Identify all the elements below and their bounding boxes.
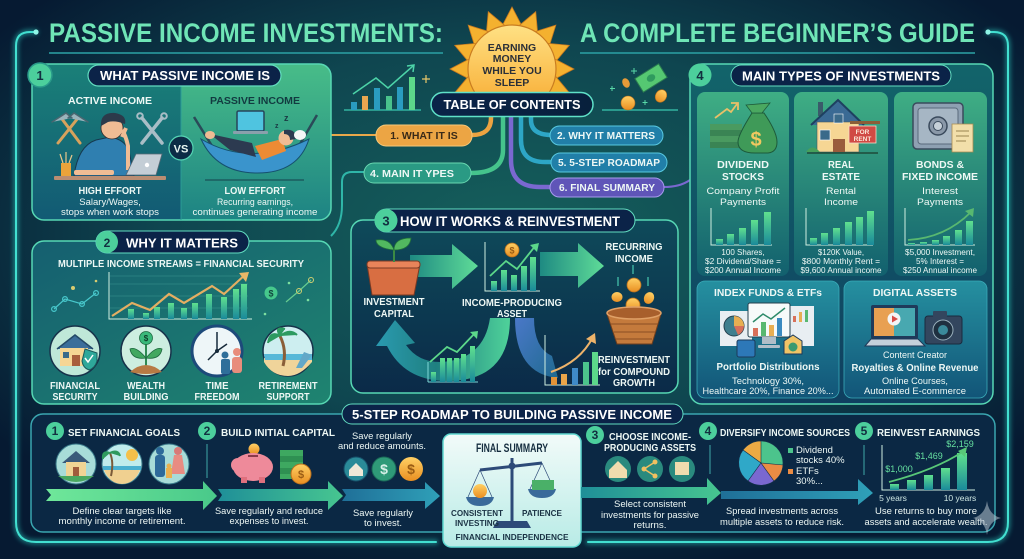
card: index funds and etfs: INDEX FUNDS & ETFs xyxy=(714,288,822,299)
text: step 2b description xyxy=(353,508,413,529)
icon: wrenches xyxy=(137,113,167,143)
icon: potted seedling xyxy=(367,238,420,295)
card: digital assets xyxy=(844,281,987,398)
benefit: time freedom xyxy=(192,326,242,403)
chart: compound growth: 10 years xyxy=(944,493,976,503)
arrow: capital to asset xyxy=(410,244,478,289)
title: A COMPLETE BEGINNER’S GUIDE xyxy=(580,18,975,48)
text: bonds: Interest xyxy=(922,186,958,197)
text: digital assets: Royalties & Online Revenue xyxy=(852,363,979,374)
icon: flying cash and coins xyxy=(602,64,678,110)
text: step 3 description: investments for passive xyxy=(601,510,699,521)
step 3: CHOOSE INCOME- xyxy=(609,432,691,443)
icon: family goal xyxy=(149,444,189,484)
toc item: main types: 4. MAIN IT YPES xyxy=(370,169,454,180)
chart: diversification pie xyxy=(739,441,783,485)
text: bonds xyxy=(902,160,978,208)
toc item: 5-step roadmap xyxy=(551,153,667,172)
text: dividend stocks: DIVIDEND xyxy=(717,160,769,171)
benefit: wealth building: WEALTH xyxy=(127,381,165,392)
text: bonds: Payments xyxy=(917,197,963,208)
arrow: step 2b xyxy=(342,482,440,509)
card: final summary: FINANCIAL INDEPENDENCE xyxy=(456,532,569,542)
sun badge: SLEEP xyxy=(495,77,529,89)
icon: growth chart in loop xyxy=(428,331,478,382)
card: real estate xyxy=(794,92,888,276)
heading: how it works: 3 xyxy=(382,214,390,228)
benefit: time freedom: TIME xyxy=(206,381,229,392)
card: bonds and fixed income xyxy=(894,92,987,276)
icon: house for rent xyxy=(806,100,880,153)
benefit: wealth building: $ xyxy=(144,334,149,343)
icon: asset tokens xyxy=(605,456,695,482)
text: low effort: LOW EFFORT xyxy=(224,186,286,197)
step 4: 4 xyxy=(705,424,712,438)
chart: compound growth: $1,469 xyxy=(915,451,943,461)
icon: person in hammock with laptop: z xyxy=(284,113,289,123)
arrow: asset to income xyxy=(540,243,604,288)
benefit: wealth building: BUILDING xyxy=(124,392,169,403)
sun badge: WHILE YOU xyxy=(482,65,542,77)
badge: vs: VS xyxy=(174,144,188,156)
text: step 2b description: Save regularly xyxy=(353,508,413,519)
text: high effort: Salary/Wages, xyxy=(79,197,141,208)
benefit: financial security xyxy=(50,326,100,403)
text: real estate: ESTATE xyxy=(822,172,860,183)
benefit: financial security: SECURITY xyxy=(52,392,98,403)
icon: income producing asset chart: $ xyxy=(509,246,515,256)
text: digital assets xyxy=(852,350,979,397)
chart: rental bars xyxy=(806,208,874,245)
label: passive income: PASSIVE INCOME xyxy=(210,96,300,107)
text: dividend example: $200 Annual Income xyxy=(705,266,782,275)
card: final summary xyxy=(443,434,581,547)
step 2: BUILD INITIAL CAPITAL xyxy=(221,428,335,439)
step 3: 3 xyxy=(592,428,599,442)
panel 1: what passive income is xyxy=(28,63,331,220)
icon: cash and coin stack xyxy=(280,450,311,484)
label: reinvestment for compound growth: REINVESTMENT xyxy=(598,355,670,366)
icon: small dollar line chart right xyxy=(264,278,314,315)
chart: interest curve xyxy=(905,208,975,245)
text: bonds: BONDS & xyxy=(916,160,964,171)
label: reinvestment for compound growth: GROWTH xyxy=(613,378,655,389)
label: recurring income: INCOME xyxy=(615,254,653,265)
toc item: what it is: 1. WHAT IT IS xyxy=(390,130,458,142)
text: low effort: continues generating income xyxy=(192,207,318,218)
text: rental example xyxy=(800,248,882,275)
step 1: SET FINANCIAL GOALS xyxy=(68,428,180,439)
label: active income: ACTIVE INCOME xyxy=(68,96,152,107)
label: recurring income xyxy=(606,242,663,265)
text: step 5 description: Use returns to buy more xyxy=(875,506,977,517)
legend: pie: 30%... xyxy=(796,476,823,487)
icon: piggy bank xyxy=(231,444,273,483)
step 5: 5 xyxy=(861,424,868,438)
pill: table of contents xyxy=(431,92,593,116)
text: bond example: $5,000 Investment, xyxy=(905,248,975,257)
text: bond example: $250 Annual income xyxy=(903,266,978,275)
step 2b: save regularly xyxy=(338,431,440,529)
text: portfolio distributions: Technology 30%, xyxy=(732,376,804,387)
heading: what passive income is: WHAT PASSIVE INCOME IS xyxy=(100,68,270,83)
text: dividend example: $2 Dividend/Share = xyxy=(705,257,781,266)
icon: person in hammock with laptop: z xyxy=(275,123,279,130)
text: high effort xyxy=(61,186,159,218)
text: real estate xyxy=(822,160,860,208)
text: portfolio distributions: Portfolio Distributions xyxy=(716,362,820,373)
text: dividend stocks: STOCKS xyxy=(722,172,764,183)
arrow: step 2 xyxy=(218,481,343,510)
toc item: final summary xyxy=(550,178,664,197)
text: portfolio distributions xyxy=(702,362,834,397)
arrow: reinvest loop back to capital xyxy=(376,318,510,381)
text: step 3 description: Select consistent xyxy=(614,499,686,510)
text: step 4 description: multiple assets to reduce risk. xyxy=(720,517,844,528)
benefit: retirement support: RETIREMENT xyxy=(258,381,318,392)
text: step 5 description xyxy=(864,506,988,528)
icon: three round tokens xyxy=(344,457,423,481)
label: income producing asset xyxy=(462,298,562,320)
icon: coins falling into basket xyxy=(607,265,661,344)
icon: balance scale xyxy=(466,458,556,528)
icon: portfolio monitors xyxy=(720,303,814,357)
text: step 1 description: Define clear targets like xyxy=(72,506,172,517)
text: dividend stocks: Payments xyxy=(720,197,766,208)
icon: cash and coin stack: $ xyxy=(298,469,304,481)
arrow: step 1 xyxy=(46,481,217,510)
icon: safe and certificate xyxy=(913,103,973,152)
step 4 xyxy=(699,422,873,528)
text: step 2 description: expenses to invest. xyxy=(230,516,308,527)
text: rental example: $120K Value, xyxy=(818,248,864,257)
heading: roadmap: 5-STEP ROADMAP TO BUILDING PASSIVE INCOME xyxy=(352,407,672,422)
icon: three round tokens: $ xyxy=(380,461,388,477)
title: PASSIVE INCOME INVESTMENTS: xyxy=(49,18,443,48)
heading: main types xyxy=(731,65,951,86)
step 1: 1 xyxy=(52,424,59,438)
text: step 2b description: to invest. xyxy=(364,518,402,529)
icon: small dollar line chart right: $ xyxy=(268,288,274,298)
card: dividend stocks xyxy=(697,92,789,276)
toc item: why it matters: 2. WHY IT MATTERS xyxy=(557,131,655,142)
card: final summary: CONSISTENT xyxy=(451,508,504,518)
arrow: step 3 xyxy=(581,478,721,505)
card: final summary: INVESTING xyxy=(455,518,499,528)
step 5: REINVEST EARNINGS xyxy=(877,428,980,439)
icon: rising bar chart xyxy=(344,65,430,110)
table of contents connectors xyxy=(331,112,690,236)
step 5 xyxy=(855,422,988,528)
benefit: time freedom: FREEDOM xyxy=(194,392,240,403)
label: reinvestment for compound growth xyxy=(598,355,670,389)
benefit: retirement support xyxy=(258,326,318,403)
sun badge: EARNING xyxy=(488,42,536,54)
badge 4 xyxy=(688,64,712,86)
badge 1 xyxy=(28,63,52,87)
text: rental example: $9,600 Annual income xyxy=(800,266,882,275)
badge 4: 4 xyxy=(696,68,704,83)
chart: compound growth: $1,000 xyxy=(885,464,913,474)
arrow: step 4 xyxy=(721,479,873,505)
panel 2: why it matters xyxy=(32,231,331,404)
card: index funds and etfs xyxy=(697,281,839,398)
benefit: financial security: FINANCIAL xyxy=(50,381,100,392)
text: step 4 description xyxy=(720,506,844,528)
icon: house goal xyxy=(56,444,96,484)
step 4: DIVERSIFY INCOME SOURCES xyxy=(720,428,850,439)
legend: pie: stocks 40% xyxy=(796,455,845,466)
step 2: 2 xyxy=(204,424,211,438)
watermark sparkle xyxy=(973,501,1001,535)
label: income producing asset: INCOME-PRODUCING xyxy=(462,298,562,309)
icon: income producing asset chart xyxy=(485,242,540,291)
text: low effort xyxy=(192,186,318,218)
title xyxy=(49,18,975,53)
label: investment capital: CAPITAL xyxy=(374,309,414,320)
toc item: final summary: 6. FINAL SUMMARY xyxy=(559,183,655,194)
icon: money bag: $ xyxy=(750,129,762,151)
text: step 3 description xyxy=(601,499,699,531)
icon: laptop with video and camera xyxy=(865,305,962,346)
text: dividend example xyxy=(705,248,782,275)
card: final summary: PATIENCE xyxy=(522,508,562,518)
icon: three round tokens: $ xyxy=(407,461,415,477)
heading: main types: MAIN TYPES OF INVESTMENTS xyxy=(742,68,940,84)
text: real estate: Rental xyxy=(826,186,856,197)
text: step 1 description: monthly income or retirement. xyxy=(58,516,186,527)
benefit: wealth building xyxy=(121,326,171,403)
toc item: main types xyxy=(364,163,471,183)
text: bonds: FIXED INCOME xyxy=(902,172,978,183)
line and bar chart xyxy=(109,272,252,319)
panel 4: main types of investments xyxy=(688,64,993,404)
subheading: MULTIPLE INCOME STREAMS = FINANCIAL SECURITY xyxy=(58,259,304,270)
text: bond example: 5% Interest = xyxy=(916,257,964,266)
icon: money bag xyxy=(710,103,777,153)
icon: person in hammock with laptop xyxy=(194,111,317,173)
toc item: 5-step roadmap: 5. 5-STEP ROADMAP xyxy=(558,158,660,169)
arrow: blue curve to reinvestment xyxy=(515,318,558,378)
heading: how it works: HOW IT WORKS & REINVESTMENT xyxy=(400,213,620,229)
card: digital assets: DIGITAL ASSETS xyxy=(873,288,957,299)
step 3: PRODUCING ASSETS xyxy=(604,443,696,454)
step 2b: save regularly: Save regularly xyxy=(352,431,412,442)
icon: stressed worker at laptop xyxy=(54,113,166,180)
step 3 xyxy=(581,426,721,531)
label: investment capital xyxy=(364,297,424,320)
toc item: why it matters xyxy=(550,126,663,145)
text: high effort: stops when work stops xyxy=(61,207,159,218)
text: dividend stocks: Company Profit xyxy=(706,186,780,197)
step 1 xyxy=(46,422,217,527)
label: income producing asset: ASSET xyxy=(497,309,527,320)
text: step 3 description: returns. xyxy=(634,520,666,531)
text: step 1 description xyxy=(58,506,186,527)
panel 5: five-step roadmap xyxy=(31,404,1001,547)
heading: why it matters xyxy=(96,231,249,253)
text: real estate: REAL xyxy=(828,160,854,171)
text: dividend example: 100 Shares, xyxy=(721,248,765,257)
icon: house for rent: RENT xyxy=(854,136,871,143)
pill: table of contents: TABLE OF CONTENTS xyxy=(444,97,581,112)
icon: crossed hammers xyxy=(52,113,88,143)
chart: compound growth: $2,159 xyxy=(946,439,974,449)
card: final summary: FINAL SUMMARY xyxy=(476,441,548,455)
chart: dividend bars xyxy=(711,208,772,245)
chart: compound growth xyxy=(879,439,976,503)
icon: small line chart left xyxy=(52,280,98,311)
toc item: what it is xyxy=(376,125,472,146)
text: rental example: $800 Monthly Rent = xyxy=(802,257,880,266)
step 2 xyxy=(198,422,343,527)
text: dividend stocks xyxy=(706,160,780,208)
panel 3: how it works and reinvestment xyxy=(351,209,678,393)
heading: how it works xyxy=(374,209,635,232)
legend: pie xyxy=(788,445,845,487)
legend: pie: ETFs xyxy=(796,466,819,477)
icon: compound growth chart xyxy=(545,333,600,385)
text: step 4 description: Spread investments across xyxy=(726,506,838,517)
badge: vs xyxy=(169,136,193,160)
badge 1: 1 xyxy=(36,68,44,83)
sun badge xyxy=(450,7,574,113)
label: investment capital: INVESTMENT xyxy=(364,297,424,308)
text: step 2 description xyxy=(215,506,323,527)
icon: house for rent: FOR xyxy=(856,129,870,136)
text: portfolio distributions: Healthcare 20%, Finance 20%... xyxy=(702,386,834,397)
text: high effort: HIGH EFFORT xyxy=(78,186,142,197)
sun badge: MONEY xyxy=(493,53,531,65)
benefit: retirement support: SUPPORT xyxy=(266,392,310,403)
label: reinvestment for compound growth: for COMPOUND xyxy=(598,367,670,378)
text: low effort: Recurring earnings, xyxy=(217,197,293,208)
chart: compound growth: 5 years xyxy=(879,493,907,503)
text: digital assets: Content Creator xyxy=(883,350,947,361)
text: real estate: Income xyxy=(824,197,858,208)
legend: pie: Dividend xyxy=(796,445,833,456)
heading: why it matters: WHY IT MATTERS xyxy=(126,236,238,250)
text: bond example xyxy=(903,248,978,275)
icon: beach goal xyxy=(102,444,142,484)
step 2b: save regularly: and reduce amounts. xyxy=(338,441,426,452)
text: digital assets: Online Courses, xyxy=(882,376,948,387)
text: step 2 description: Save regularly and reduce xyxy=(215,506,323,517)
text: step 5 description: assets and accelerate wealth. xyxy=(864,517,988,528)
heading: why it matters: 2 xyxy=(104,236,111,250)
heading: what passive income is xyxy=(88,65,281,86)
label: recurring income: RECURRING xyxy=(606,242,663,253)
text: digital assets: Automated E-commerce xyxy=(864,386,966,397)
